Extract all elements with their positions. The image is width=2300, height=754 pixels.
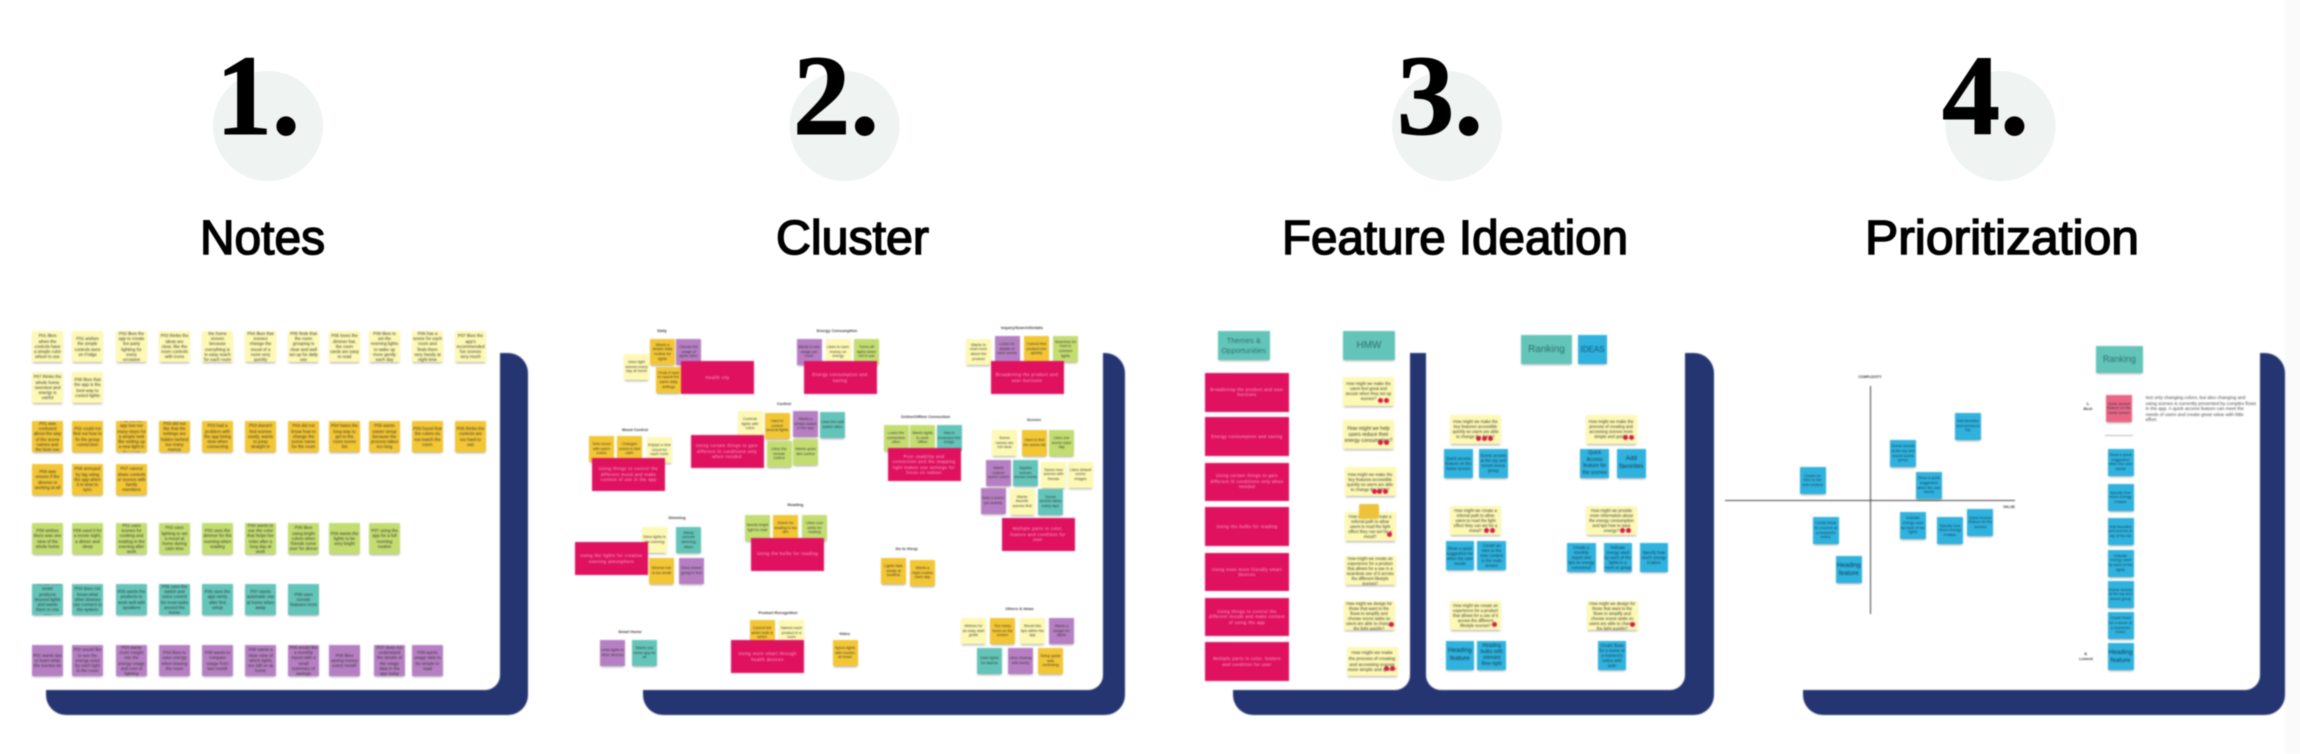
matrix: value vs complexity: Show a quick suggestion when the user needs (1917, 476, 1941, 494)
cluster: reading: Needs bright light to read (747, 523, 768, 532)
idea group: right column: Create a monthly report and tips on energy consumed (1568, 545, 1594, 570)
yellow notes: P02 likes the app to create fun party lighting for every occasion (119, 331, 144, 362)
step 1 heading (200, 32, 325, 265)
matrix: value vs complexity: Create an intro to the new content (1802, 474, 1823, 487)
themes and opportunities column: Multiple parts in color, feature and condition for user (1213, 656, 1281, 666)
matrix: value vs complexity: VALUE (2003, 505, 2015, 509)
teal notes: P05 uses the switch and voice control for most tasks around the home (161, 584, 188, 615)
cluster: dimming: Dimming (668, 515, 686, 520)
cluster: go to sleep (880, 546, 936, 588)
teal notes: P04 does not know what other devices can connect to the system (73, 586, 102, 612)
cluster: scenes (980, 417, 1094, 552)
cluster: others and ideas: Likes sharing with family (1009, 656, 1032, 665)
cluster: reading: Using the bulbs for reading (757, 551, 818, 556)
yellow notes: P06 has a scene for each room and finds them very handy at night time (413, 331, 442, 362)
matrix: value vs complexity: Specify how much energy it takes (1939, 524, 1961, 537)
cluster: scenes: Sets a scene per activity (982, 496, 1004, 504)
panel: prioritization (1724, 345, 2286, 716)
yellow notes: P05 loves the dimmer bar, the room cards are easy to read (330, 333, 359, 359)
ranking list: Best (2084, 406, 2092, 411)
cluster: dimming: Using the lights for creative evening atmosphere (580, 553, 643, 564)
cluster: dimming: Dims before going to bed (681, 566, 702, 575)
icon: step 3 circle (1392, 71, 1502, 181)
purple notes: P08 wants usage data to be simple to read (414, 650, 441, 671)
cluster: inquiry details: Searches for how to connect lights (1055, 340, 1076, 358)
cluster: energy consumption: Energy consumption and saving (812, 372, 868, 382)
cluster: scenes: Scene names are not clear (996, 436, 1013, 449)
title: Feature Ideation: Feature Ideation (1282, 212, 1628, 265)
green notes: P04 wants to use the color that helps her relax after a long day at work (247, 523, 274, 554)
cluster: online offline connection: Poor usability and connection and the mapping light makes use settings for focus on subset (892, 454, 956, 475)
icon: step 4 circle (1946, 71, 2056, 181)
cluster: video: Syncs lights with movies at home (835, 646, 855, 659)
cluster: scenes: Applies scenes across rooms (1014, 466, 1037, 479)
cluster: inquiry details: Wants to read more about the product (970, 343, 987, 361)
orange notes: P04 did not know how to change the scene name for the room (291, 423, 316, 449)
cluster: others and ideas: Setup guide was confusing (1040, 654, 1061, 667)
idea group: right column: How might we provide more information about the energy consumption and tips how to save energy? (1589, 508, 1634, 533)
cluster: smart home: Smart Home (618, 629, 642, 634)
ranking list: Heading feature (2109, 648, 2132, 664)
icon: step 2 circle (790, 71, 900, 181)
ranking list: 1. (2086, 401, 2090, 406)
ranking list: Quick access feature on the home screen (2107, 402, 2131, 415)
yellow notes: P06 likes to set the morning lights to wake up more gently each day (371, 331, 398, 362)
ranking list: Specify how much energy it takes (2110, 491, 2131, 504)
matrix: value vs complexity: Quick Access feature for the scenes (1969, 516, 1992, 529)
purple notes: P07 does not understand the details of the usage data in the app today (377, 645, 402, 676)
HMW column: How might we create a referral path to allow users to read the light effect they can set for a mood? (1348, 514, 1392, 539)
step number 1: 1. (216, 32, 300, 159)
cluster: online offline connection: Loses the connection often (887, 431, 905, 444)
cluster: control: Controls lights with voice (742, 417, 758, 430)
cluster: online offline connection: Wants lights to work offline (912, 431, 933, 444)
ranking header: Ranking (1528, 344, 1565, 355)
title: Cluster: Cluster (776, 212, 929, 265)
cluster: product recognition: Using more smart through health devices (738, 651, 797, 662)
orange notes: P02 could not find out how to fix the group connection (73, 426, 102, 447)
HMW column (1342, 330, 1399, 678)
cluster: reading: Reading (788, 502, 803, 507)
cluster: inquiry details (965, 325, 1080, 396)
ranking list: Add favorites and scenes to top of the list (2109, 525, 2132, 538)
idea group: left column (1442, 414, 1510, 672)
cluster: control: Using certain things to gain different lit conditions only when needed (696, 443, 758, 459)
idea group: left column: How might we make the key features accessible quickly so users are able to change the lights? (1452, 419, 1499, 439)
cluster: inquiry details: Broadening the product and user horizons (996, 372, 1058, 382)
cluster: daily: Health city (705, 375, 730, 380)
teal notes: P08 uses remote features most (290, 592, 317, 607)
cluster: energy consumption: Wants to see usage per room (798, 345, 820, 358)
step number 3: 3. (1397, 32, 1483, 159)
idea group: left column: Show a quick suggestion for when the user needs (1447, 546, 1473, 566)
comment bubble (1359, 504, 1379, 519)
cluster: others and ideas: Would like tips within the app (1021, 624, 1044, 637)
purple notes: P06 would like a monthly report with a small summary of savings (289, 645, 318, 676)
cluster: daily (623, 328, 756, 396)
cluster: daily: Uses light scenes every day at home (625, 360, 648, 373)
cluster: control: Control (777, 401, 791, 406)
orange notes: P03 doesn't find scenes easily, wants to jump straight in (248, 423, 273, 449)
cluster: control: Wants a simple switch in the app (794, 417, 817, 430)
header: ranking (2096, 346, 2143, 373)
cluster: smart home (599, 629, 658, 668)
cluster: video: Video (839, 631, 850, 636)
cluster: mood control: Enjoys a new mood for each room (648, 443, 671, 456)
page edge strip (2285, 0, 2300, 754)
cluster: daily: Checks the usage of lights often (679, 345, 698, 358)
cluster: energy consumption: Turns off lights when not in use (857, 345, 876, 358)
cluster: control: Hard to control several lights (766, 419, 788, 432)
green notes: P06 wants the lights to be very bright (331, 531, 358, 546)
ranking rationale text: Not only changing colors, but also changing and using scenes is currently presented by complex flows in the app. A quick access feature can meet the needs of users and create great value with little effort. (2146, 395, 2256, 422)
teal notes (30, 582, 320, 618)
cluster: product recognition: Product Recognition (758, 610, 798, 615)
cluster: dimming: Dimmer bar is too small (652, 566, 671, 575)
header: HMW (1343, 331, 1395, 360)
cluster: control: Likes the remote control (771, 447, 787, 460)
header: themes (1218, 331, 1270, 360)
yellow notes: P04 likes that scenes change the mood of a room very quickly (247, 331, 274, 362)
cluster: scenes: Multiple parts in color, feature and condition for user (1010, 526, 1066, 542)
cluster: scenes: Hard to find the scene list (1023, 438, 1046, 447)
idea group: left column: Heading bulbs with relevant flow right (1481, 643, 1503, 667)
cluster: reading: Scene for reading is too dim (774, 521, 797, 534)
orange notes: P01 was confused about the way of the scene names and the best use (34, 421, 61, 452)
cluster: reading: Likes cool white for reading (806, 521, 823, 534)
idea group: right column: Create flows for a scene at a moment's notice with auto (1599, 642, 1625, 668)
orange notes: P05 wants easier setup because the process takes too long (371, 423, 398, 449)
cluster: product recognition: Cannot tell which bulb is which (751, 626, 773, 639)
orange notes: P03 did not like that the settings are hidden behind too many menus (161, 421, 188, 452)
themes and opportunities column (1204, 330, 1290, 682)
cluster: online offline connection: Online/Offline Connection (901, 414, 950, 419)
title: Notes: Notes (200, 212, 325, 265)
purple notes: P04 likes to save energy when leaving the room (162, 650, 187, 671)
HMW column: How might we make the key features accessible quickly so users are able to change the lights? (1347, 472, 1393, 492)
panel: feature ideation (1204, 330, 1716, 716)
purple notes (31, 644, 444, 678)
idea group: right column (1566, 414, 1670, 672)
orange notes: P03 had a problem with the app being slow when connecting (204, 423, 231, 449)
feature notes (1955, 412, 1981, 440)
HMW column: How might we make the process of creating and accessing scenes more simple and quick? (1348, 650, 1396, 672)
idea group: right column: How might we make the process of creating and accessing scenes more simple and quick? (1589, 419, 1633, 439)
header: ranking: Ranking (2103, 354, 2136, 364)
purple notes: P06 likes saving money every month (331, 653, 358, 668)
idea group: left column: How might we create an experience for a product that allows for a use of it across the different lifestyle scenes? (1453, 603, 1498, 628)
purple notes: P05 wants a clear view of which lights are still on at home (248, 647, 273, 673)
cluster: go to sleep: Wants a night routine each day (912, 566, 933, 579)
idea group: left column: Create an intro to the new content in the main screen (1480, 543, 1503, 568)
purple notes: P01 wants tips to learn what the scenes do (33, 653, 62, 668)
panel: cluster (574, 325, 1126, 716)
cluster: control (690, 401, 846, 470)
themes and opportunities column: Using the bulbs for reading (1216, 524, 1278, 529)
ranking list: Lowest (2079, 656, 2093, 661)
cluster: others and ideas: Others & Ideas (1005, 606, 1034, 611)
idea group: right column: Indicate energy used by each of the lights in a room or group (1605, 545, 1631, 570)
ranking list (2078, 345, 2144, 672)
green notes: P02 uses lighting to set a mood at home during calm time (162, 525, 187, 551)
cluster: online offline connection: Has to reconnect the bridge (938, 431, 961, 444)
idea group: left column: How might we create a referral path to allow users to read the light effect they can set for a mood? (1454, 508, 1497, 533)
matrix: value vs complexity: Scene access at the top and recent scene group (1891, 444, 1915, 462)
matrix: value vs complexity: Create flows for a scene at a moment's notice (1814, 521, 1837, 539)
cluster: mood control: Sets mood with warm colors (592, 442, 611, 455)
green notes: P07 using the app for a full morning routine (371, 528, 398, 549)
cluster: scenes: Wants custom scene colors (988, 466, 1009, 479)
idea group: right column: Specify how much energy it takes (1642, 550, 1666, 565)
green notes: P05 likes using bright colors when friends come over for dinner (289, 525, 318, 551)
cluster: go to sleep: Go to Sleep (895, 546, 918, 551)
cluster: online offline connection (882, 414, 964, 482)
cluster: product recognition (730, 610, 806, 674)
cluster: inquiry details: Looks for details of each scene (997, 342, 1017, 355)
icon: step 1 circle (213, 71, 323, 181)
green notes (30, 522, 402, 556)
cluster: scenes: Scene access takes many taps (1040, 495, 1061, 508)
step number 2: 2. (793, 32, 879, 159)
themes and opportunities column: Broadening the product and user horizons (1210, 387, 1284, 397)
themes and opportunities column: Using certain things to gain different lit conditions only when needed (1210, 473, 1284, 489)
cluster: smart home: Links lights to other devices (601, 648, 624, 657)
yellow notes: P07 likes the app's recommended fun scenes very much (456, 333, 485, 359)
cluster: scenes: Likes default scene images (1070, 468, 1091, 481)
cluster: others and ideas: Wishes for an easy start guide (963, 624, 984, 637)
purple notes: P03 wants more insight into the energy usage and cost of lighting (118, 645, 145, 676)
themes and opportunities column: Using even more friendly smart devices (1212, 567, 1282, 577)
idea group: right column: Quick Access feature for the scenes (1583, 450, 1607, 476)
cluster: mood control: Using things to control the different mood and make context of use in the app (599, 466, 658, 482)
green notes: P01 uses scenes for cooking and reading in the evening after work (118, 523, 145, 554)
idea group: left column: Quick access feature on the home screen (1445, 456, 1471, 471)
cluster: others and ideas: Uses lights for alarms (980, 656, 999, 665)
orange notes (30, 420, 488, 498)
matrix: value vs complexity (1724, 374, 2016, 615)
ranking list: Show a quick suggestion when the user needs (2109, 453, 2132, 471)
cluster: dimming (574, 515, 706, 586)
cluster: inquiry details: Cannot find product info quickly (1027, 342, 1046, 355)
yellow notes: P05 finds that the room grouping is clear and well set up for daily use (289, 331, 318, 362)
teal notes: P06 uses the app rarely after first setup (205, 589, 230, 610)
panel: notes (30, 330, 530, 716)
cluster: daily: Finds it hard to repeat the same daily settings (658, 371, 679, 389)
cluster: control: Uses the wall switch often (821, 420, 844, 429)
themes and opportunities column: Energy consumption and saving (1211, 434, 1283, 439)
cluster: reading (744, 502, 828, 572)
yellow notes: P07 thinks the whole home overview and energy is useful (34, 374, 61, 400)
matrix: value vs complexity: Indicate energy used by each of the lights (1901, 516, 1925, 534)
cluster: scenes: Wants favorite scenes first (1012, 495, 1032, 508)
ranking list: Create flows for a scene at a moment's notice (2109, 616, 2132, 634)
yellow notes: P01 wishes the simple controls were on Fridge (74, 336, 101, 357)
cluster: scenes: Scenes (1027, 417, 1041, 422)
purple notes: P02 would like to see the energy used by each light in the room (73, 647, 102, 673)
cluster: energy consumption: Likes to save money on energy (827, 345, 849, 358)
cluster: energy consumption (796, 328, 880, 396)
cluster: product recognition: Names each product in a room (781, 626, 802, 639)
teal notes: P07 wants automatic use at home when away (247, 589, 274, 610)
yellow notes: P01 likes when the controls have a simple color wheel to use (34, 333, 61, 359)
green notes: P08 wishes there was one view of the whole home (34, 528, 61, 549)
cluster: others and ideas: Too many icons on the screen (992, 624, 1013, 637)
orange notes: P06 was unsure if the dimmer is working at all (35, 469, 60, 490)
green notes: P03 uses the dimmer for the evening when reading (203, 528, 232, 549)
cluster: scenes: Uses one scene each day (1052, 436, 1071, 449)
ideas header (1578, 335, 1607, 364)
cluster: dimming: Wants smooth dimming steps (681, 531, 696, 549)
cluster: others and ideas (960, 606, 1076, 676)
orange notes: P04 hates the long way to get to the room scene list (331, 423, 358, 449)
step number 4: 4. (1942, 32, 2029, 159)
HMW column: How might we make the users feel great and secure when they set up scenes? (1346, 381, 1391, 401)
idea group: left column: Scene access at the top and recent scene group (1480, 453, 1506, 473)
cluster: daily: Wants a simple daily routine for lights (653, 343, 672, 361)
matrix: value vs complexity: Heading feature (1837, 562, 1861, 576)
purple notes: P05 wants to compare usage from last month (205, 650, 230, 671)
orange notes: P05 found that the colors do not match the room (413, 426, 442, 447)
yellow notes (31, 330, 487, 406)
cluster: mood control: Changes colors to feel calm (619, 442, 640, 455)
vote dots (1371, 396, 1396, 672)
step 2 heading (776, 32, 929, 265)
idea group: left column: Heading feature (1448, 647, 1472, 662)
axis labels: COMPLEXITY (1858, 375, 1882, 379)
header: themes: Themes & Opportunities (1221, 336, 1266, 354)
ideas header: IDEAS (1580, 345, 1604, 354)
ranking list: 8. (2084, 651, 2088, 656)
cluster: inquiry details: Inquiry/Search/Details (1001, 325, 1043, 330)
cluster: smart home: Wants one home app for all (633, 646, 656, 659)
header: HMW: HMW (1356, 340, 1382, 351)
themes and opportunities column: Using things to control the different moods and make context of using the app (1209, 609, 1285, 625)
orange notes: P07 cannot share controls or scenes with family members (117, 466, 146, 492)
ranking list: Scene access at the top and recent group (2109, 588, 2132, 601)
cluster: dimming: Dims lights in the evening (643, 535, 666, 544)
yellow notes: P08 likes that the app is the best way to control lights (74, 377, 101, 398)
orange notes: P08 annoyed by lag using the app when it is slow to sync (74, 466, 101, 492)
teal notes: P05 wants the products to work well with speakers (118, 589, 145, 610)
cluster: go to sleep: Lights fade slowly at bedtime (884, 564, 903, 577)
cluster: video (832, 631, 860, 668)
cluster: mood control (588, 427, 673, 492)
orange notes: P06 thinks the controls are too hard to use (457, 426, 484, 447)
feature notes: Add favorites and scenes to top (1956, 419, 1980, 432)
cluster: mood control: Mood Control (622, 427, 648, 432)
cluster: energy consumption: Energy Consumption (817, 328, 857, 333)
title: Prioritization: Prioritization (1865, 212, 2139, 265)
ranking header (1521, 335, 1572, 364)
step 3 heading (1282, 32, 1628, 265)
idea group: right column: Add favorites (1619, 455, 1643, 470)
green notes: P08 used it for a movie night, a dinner and sleep (73, 528, 102, 549)
yellow notes: P03 thinks the ideas are clear, like the room controls with icons (161, 333, 188, 359)
cluster: daily: Daily (657, 328, 667, 333)
HMW column: How might we help users reduce their energy consumption? (1345, 426, 1392, 444)
cluster: scenes: Saves new scenes with friends (1044, 468, 1063, 481)
step 4 heading (1865, 32, 2139, 265)
ranking list: Indicate energy used by each of the lights (2109, 554, 2132, 572)
cluster: others and ideas: Wants a widget for lights (1053, 624, 1070, 637)
cluster: control: Wants quick dim control (795, 447, 816, 456)
